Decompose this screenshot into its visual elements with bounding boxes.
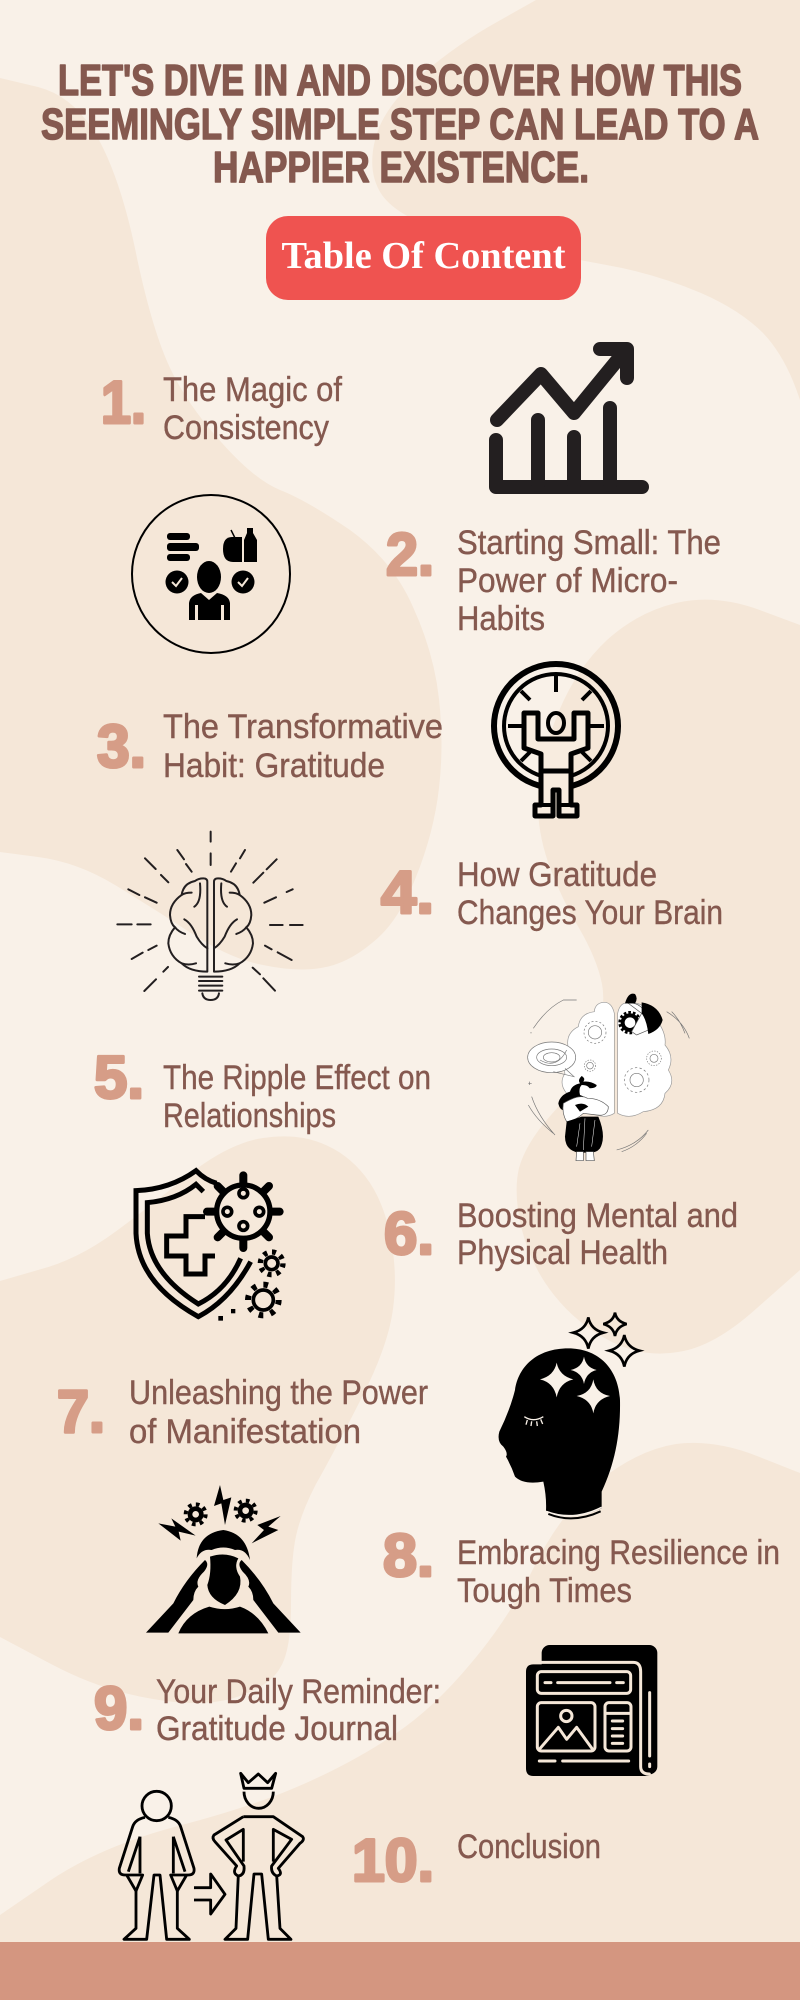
item 9: Your Daily Reminder:: [156, 1673, 441, 1711]
item 6: Physical Health: [457, 1234, 668, 1272]
item 5: The Ripple Effect on: [163, 1059, 431, 1097]
item 3: The Transformative: [163, 708, 443, 746]
icon: head with stars: [499, 1313, 639, 1518]
item 2: Habits: [457, 600, 545, 638]
title: HAPPIER EXISTENCE.: [213, 143, 589, 192]
button: table of content: [266, 216, 581, 300]
item 1: [101, 369, 343, 447]
item 8: Tough Times: [457, 1572, 632, 1610]
item 1: The Magic of: [163, 371, 343, 409]
icon: growth chart: [496, 349, 642, 487]
item 10: 10.: [352, 1827, 434, 1894]
item 7: [57, 1374, 428, 1451]
icon: habits circle: [132, 495, 290, 653]
item 5: Relationships: [163, 1097, 336, 1135]
item 7: Unleashing the Power: [129, 1374, 428, 1412]
icon: woman and brain illustration: [528, 994, 689, 1161]
item 10: [352, 1827, 601, 1894]
icon: person in clock: [494, 664, 618, 816]
item 5: 5.: [94, 1044, 144, 1111]
item 9: [94, 1673, 441, 1748]
item 7: 7.: [57, 1378, 105, 1445]
item 7: of Manifestation: [129, 1413, 361, 1451]
button: table of content: Table Of Content: [282, 235, 566, 277]
item 4: Changes Your Brain: [457, 894, 723, 932]
item 3: [97, 708, 443, 785]
title: [41, 56, 759, 192]
icon: stressed person: [146, 1485, 301, 1633]
item 8: [383, 1522, 780, 1610]
item 1: 1.: [101, 369, 146, 436]
icon: health shield: [136, 1171, 283, 1321]
item 10: Conclusion: [457, 1828, 601, 1866]
item 6: 6.: [384, 1200, 434, 1267]
item 9: Gratitude Journal: [156, 1710, 398, 1748]
item 4: How Gratitude: [457, 856, 657, 894]
footer band: [0, 1942, 800, 2000]
item 4: [381, 856, 723, 932]
item 6: Boosting Mental and: [457, 1197, 738, 1235]
item 2: Power of Micro-: [457, 562, 678, 600]
icon: brain light bulb: [117, 832, 303, 1000]
item 4: 4.: [381, 859, 434, 926]
item 3: 3.: [97, 713, 146, 780]
item 5: [94, 1044, 431, 1135]
item 2: [386, 521, 721, 638]
icon: journal page: [526, 1645, 657, 1776]
item 3: Habit: Gratitude: [163, 747, 385, 785]
icon: poor to rich transformation: [119, 1773, 303, 1939]
item 9: 9.: [94, 1675, 144, 1742]
item 8: 8.: [383, 1522, 434, 1589]
item 6: [384, 1197, 738, 1272]
item 2: Starting Small: The: [457, 524, 721, 562]
item 1: Consistency: [163, 409, 329, 447]
item 2: 2.: [386, 521, 434, 588]
